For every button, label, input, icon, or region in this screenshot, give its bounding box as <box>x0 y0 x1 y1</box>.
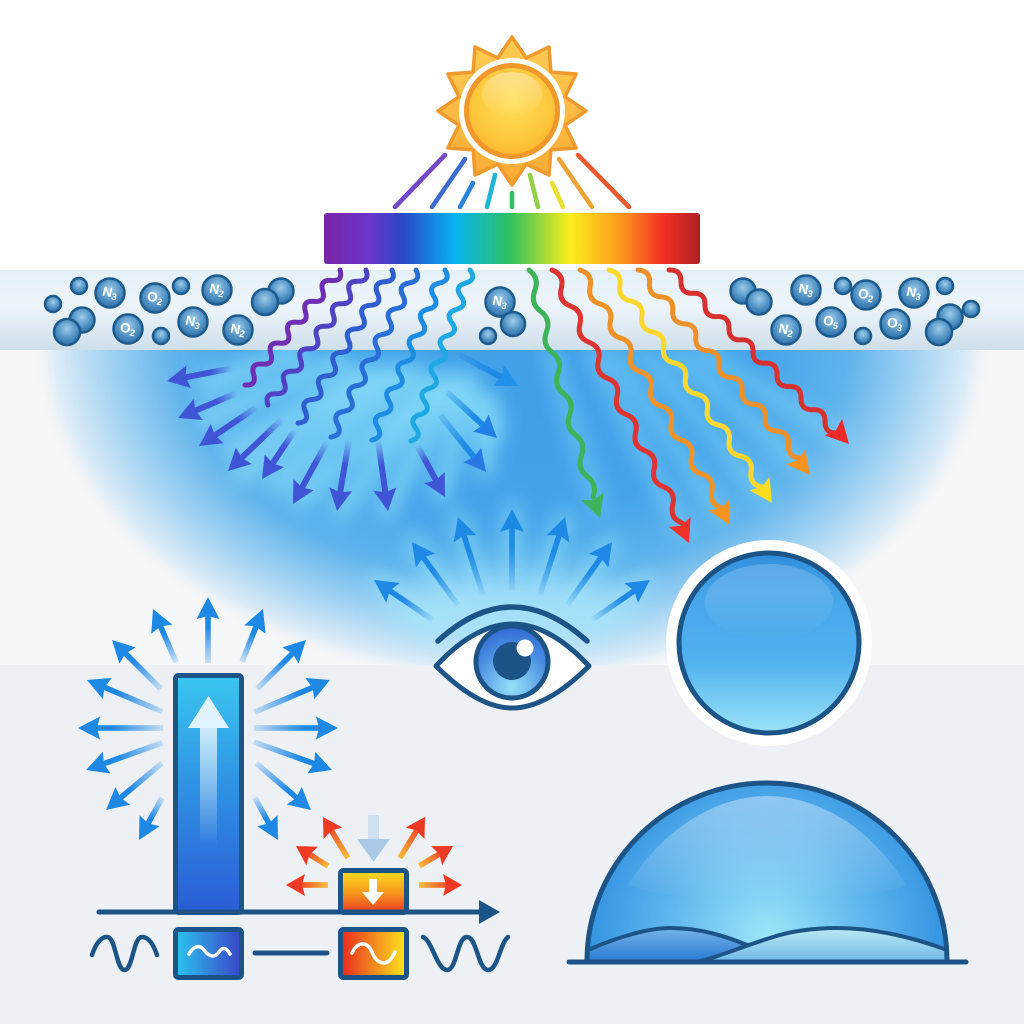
up arrow inside bar <box>188 696 229 846</box>
down arrow inside warm bar <box>362 879 384 905</box>
left hill <box>588 928 747 961</box>
molecules: right group: O <box>886 315 899 331</box>
molecules: right group: 2 <box>867 294 874 305</box>
icon: eye <box>436 607 589 708</box>
arrows radiating from the blue bar <box>78 597 338 846</box>
molecules: right group: N <box>797 281 810 297</box>
blue wavelength box <box>176 930 242 978</box>
molecules: right group: 5 <box>832 321 840 333</box>
molecules: right group: 3 <box>806 289 814 300</box>
long-wavelength wavy rays with arrowheads <box>529 270 858 548</box>
molecules: left group: 2 <box>217 289 225 300</box>
molecules: right group: 3 <box>896 323 903 334</box>
molecules: left group: N <box>208 281 221 297</box>
molecules: left group: 3 <box>193 321 201 332</box>
molecules: centre group: 3 <box>500 301 508 312</box>
green ray <box>529 270 611 522</box>
icon: blue sky disc <box>666 540 872 746</box>
molecules: left group: N <box>229 321 242 337</box>
warm arrows radiating from small bar <box>286 811 462 896</box>
scattered violet-blue arrows <box>165 345 523 513</box>
icon: sun <box>438 37 586 185</box>
molecules: right group: N <box>777 321 790 337</box>
molecules: left group: O <box>119 320 132 336</box>
molecules: centre group <box>480 288 525 344</box>
molecules: centre group: N <box>491 293 504 309</box>
deep red ray <box>669 270 858 452</box>
red wavelength box <box>340 930 406 978</box>
molecules: right group: N <box>905 284 918 300</box>
molecules: right group: O <box>857 286 870 302</box>
spectrum bar <box>324 213 700 264</box>
axis arrow <box>99 900 500 924</box>
molecules: left group: 2 <box>238 329 246 340</box>
wave sample: long left wave <box>92 937 157 970</box>
orange ray <box>580 270 741 531</box>
small warm bar <box>340 870 406 912</box>
molecules: left group: 2 <box>129 328 136 339</box>
tall blue bar <box>176 676 242 912</box>
arrows rising toward the eye <box>367 509 657 630</box>
orange ray 2 <box>638 270 819 482</box>
short-wavelength wavy rays <box>245 270 473 441</box>
wave sample: short right wave <box>423 937 508 970</box>
molecules: right group <box>730 276 979 345</box>
molecules: right group: 2 <box>786 329 794 340</box>
blue sky glow <box>44 350 980 665</box>
molecules: left group <box>45 276 294 345</box>
molecules: right group: 3 <box>914 292 922 303</box>
molecules: left group: 3 <box>110 292 118 303</box>
molecules: left group: O <box>146 289 159 305</box>
molecules: left group: N <box>101 284 114 300</box>
atmosphere band <box>0 270 1024 350</box>
icon: dome of sky over hills <box>569 783 966 962</box>
molecules: left group: 2 <box>156 297 163 308</box>
molecules: right group: O <box>822 313 835 329</box>
molecules: left group: N <box>184 313 197 329</box>
sun rays entering the prism bar <box>395 155 629 207</box>
right hill <box>713 928 947 961</box>
red ray <box>552 270 700 548</box>
faded incoming arrow above warm bar <box>357 815 390 862</box>
yellow ray <box>609 270 782 510</box>
connector line <box>255 950 327 956</box>
